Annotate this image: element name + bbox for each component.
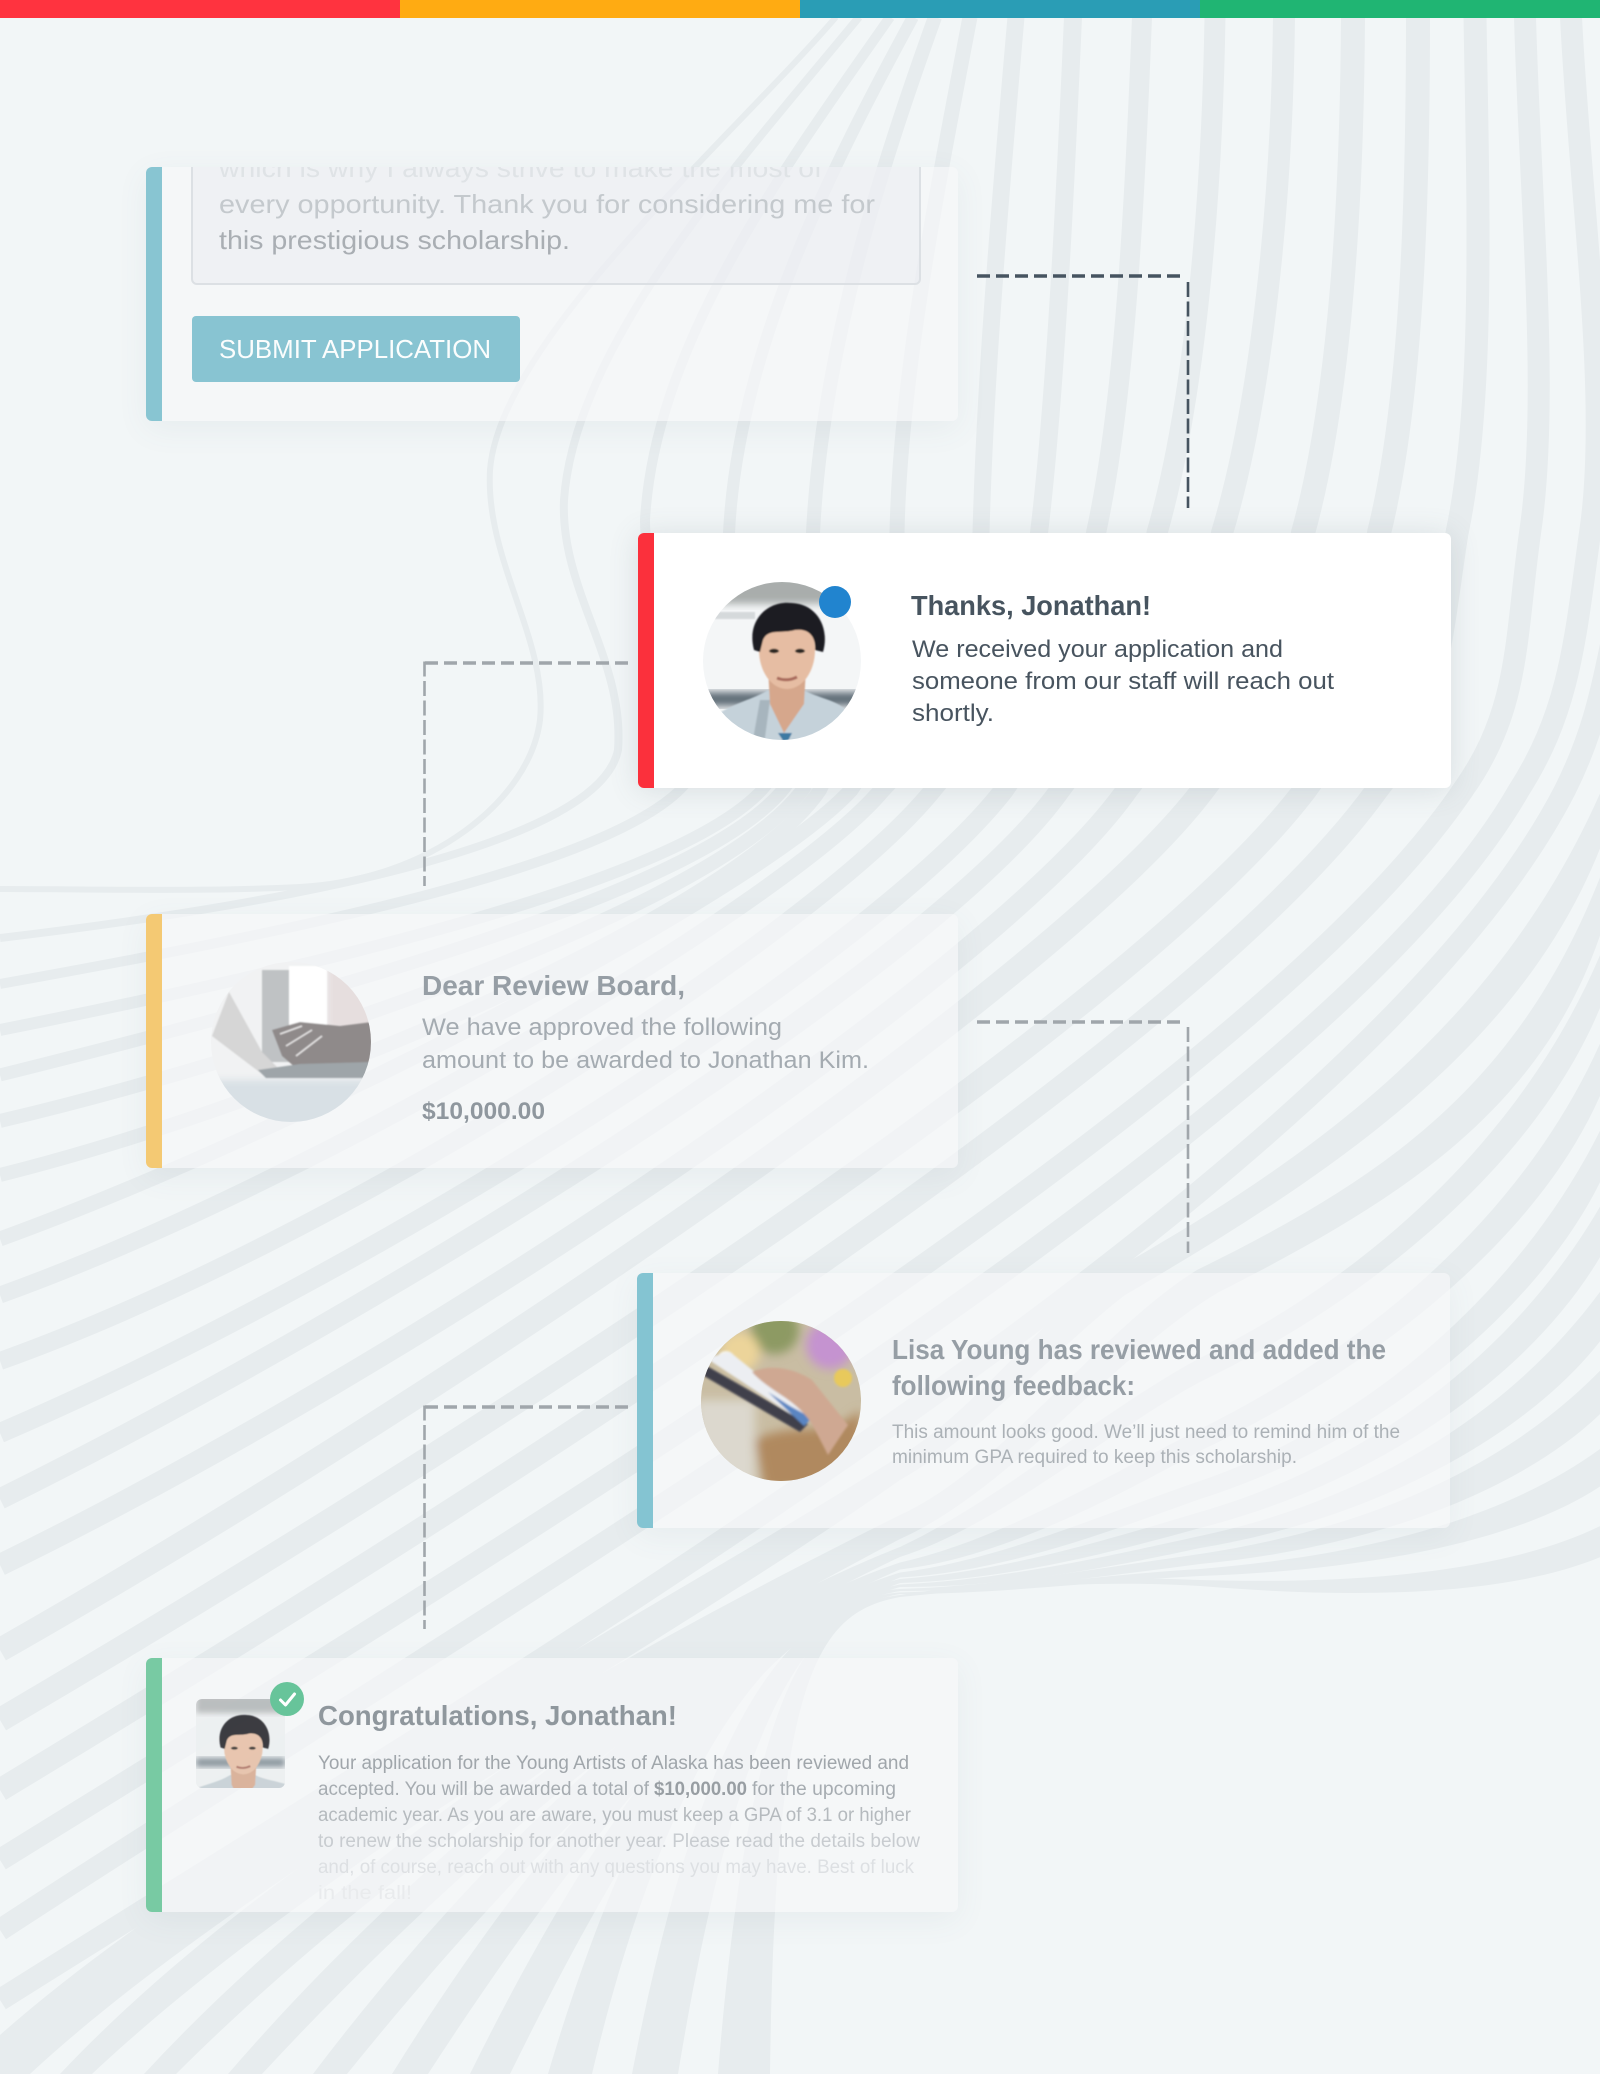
letter text: to renew the scholarship for another year. Please read the details below — [318, 1831, 920, 1852]
letter text: $10,000.00 — [654, 1779, 747, 1800]
letter text: and, of course, reach out with any questions you may have. Best of luck — [318, 1857, 914, 1878]
essay text area: every opportunity. Thank you for considering me for — [219, 189, 875, 219]
teal accent bar — [637, 1273, 653, 1528]
icon: portrait of Jonathan — [703, 582, 861, 740]
green accent bar — [146, 1658, 162, 1912]
feedback text: minimum GPA required to keep this scholarship. — [892, 1447, 1297, 1468]
heading: Lisa Young has reviewed and added the — [892, 1334, 1386, 1365]
yellow accent bar — [146, 914, 162, 1168]
icon: blue status dot — [819, 586, 851, 618]
heading — [892, 1334, 1386, 1401]
arrow: dashed connector from form to confirmation — [977, 274, 1190, 508]
red accent bar — [638, 533, 654, 788]
icon: phone photo — [701, 1321, 861, 1481]
icon: green check badge — [270, 1682, 304, 1716]
letter text: for the upcoming — [752, 1779, 896, 1800]
panel: thanks confirmation — [638, 533, 1451, 788]
icon: small portrait — [196, 1699, 285, 1788]
arrow: dashed connector from review to feedback — [977, 1020, 1190, 1253]
letter text: in the fall! — [318, 1883, 412, 1904]
feedback text — [892, 1422, 1400, 1468]
essay text area: this prestigious scholarship. — [219, 225, 570, 255]
teal accent bar — [146, 167, 162, 421]
top colour bar — [0, 0, 1600, 18]
feedback text: This amount looks good. We’ll just need to remind him of the — [892, 1422, 1400, 1443]
panel: reviewer feedback (faded) — [637, 1273, 1450, 1528]
letter text: Your application for the Young Artists of Alaska has been reviewed and — [318, 1753, 909, 1774]
message text: amount to be awarded to Jonathan Kim. — [422, 1047, 869, 1074]
message text: someone from our staff will reach out — [912, 668, 1334, 695]
icon: laptop photo — [212, 966, 371, 1122]
panel: review board notice (faded) — [146, 914, 958, 1168]
submit button — [192, 316, 520, 382]
arrow: dashed connector from confirmation to review — [423, 661, 628, 886]
letter text — [318, 1753, 920, 1904]
message text — [422, 1014, 869, 1074]
message text: shortly. — [912, 700, 994, 727]
message text: We received your application and — [912, 636, 1283, 663]
letter text: academic year. As you are aware, you must keep a GPA of 3.1 or higher — [318, 1805, 912, 1826]
heading: following feedback: — [892, 1370, 1135, 1401]
panel: congratulations letter (faded) — [146, 1658, 958, 1912]
letter text: accepted. You will be awarded a total of — [318, 1779, 650, 1800]
award amount: $10,000.00 — [422, 1098, 545, 1125]
submit button: SUBMIT APPLICATION — [219, 334, 491, 364]
heading: Thanks, Jonathan! — [911, 590, 1151, 621]
message text: We have approved the following — [422, 1014, 782, 1041]
heading: Congratulations, Jonathan! — [318, 1700, 677, 1731]
essay text area — [192, 120, 920, 284]
message text — [912, 636, 1334, 727]
arrow: dashed connector from feedback to congratulations — [423, 1405, 628, 1629]
panel: application form (faded) — [146, 167, 958, 421]
heading: Dear Review Board, — [422, 970, 685, 1001]
